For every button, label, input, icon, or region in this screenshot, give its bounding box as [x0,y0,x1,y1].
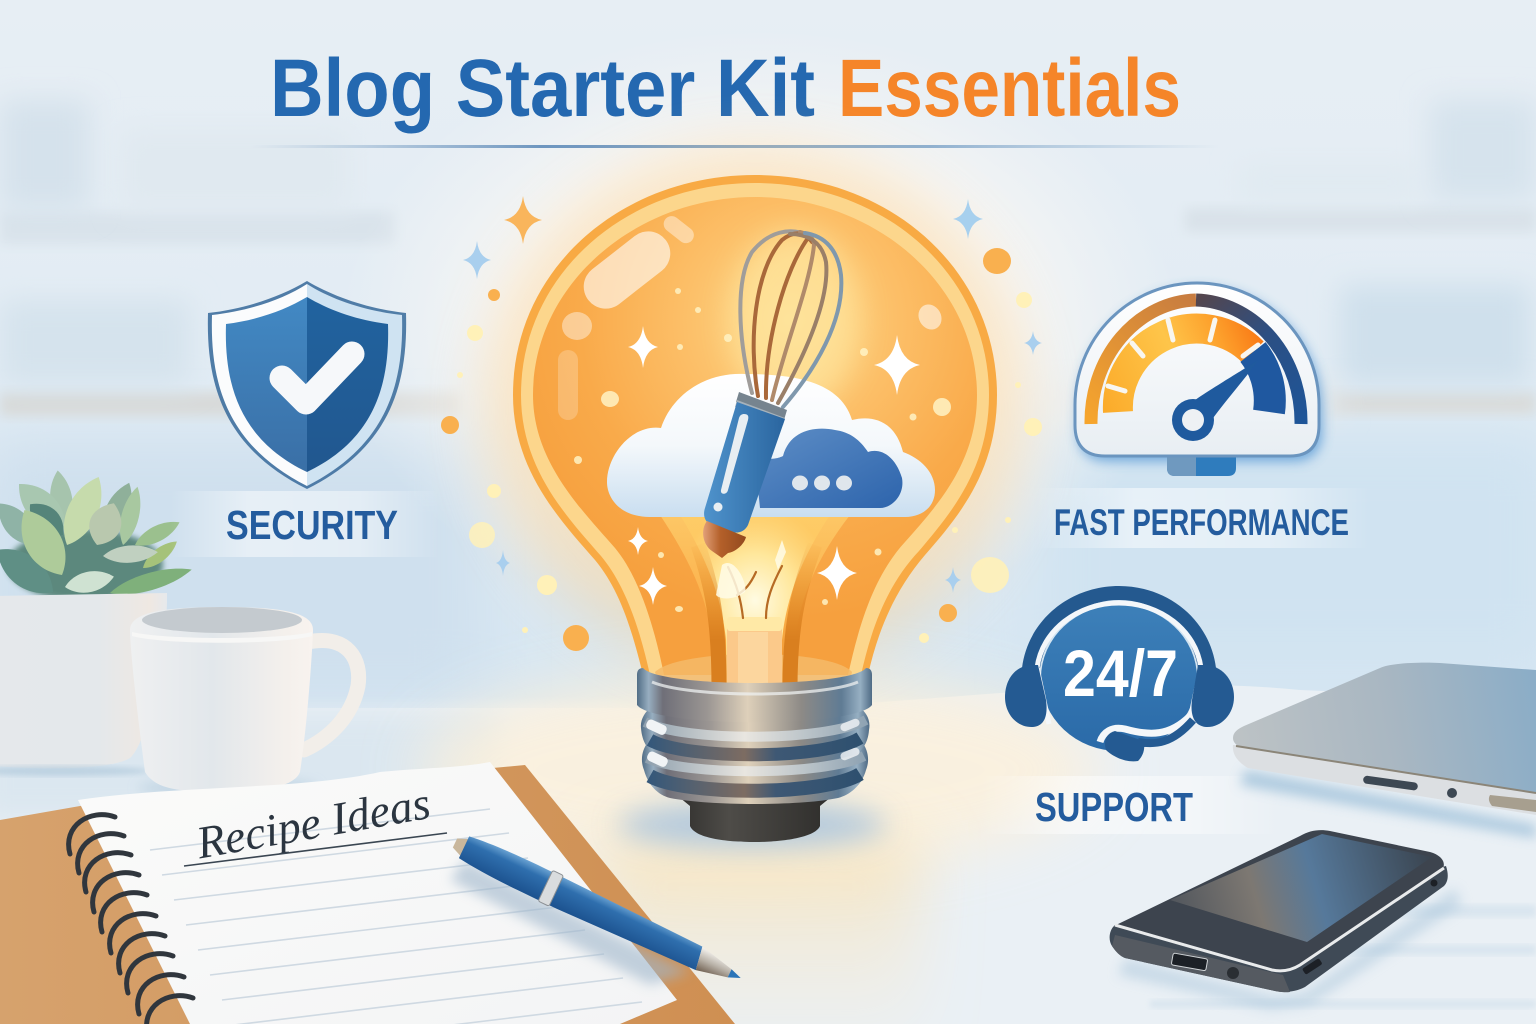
phone ports [1171,953,1208,971]
stem walls [698,545,815,688]
gauge inner band [1118,329,1253,412]
base cap [668,788,842,842]
icon: 24/7 headset [1005,586,1234,761]
headband [1022,586,1216,668]
gauge needle [1185,360,1258,432]
glass: inner fill [533,197,977,675]
glass: light band [521,183,989,675]
wires [740,231,841,407]
coffee mug [130,607,359,798]
whisk [703,231,841,558]
fast performance label: FAST PERFORMANCE [1054,502,1349,543]
handle [704,402,785,533]
gauge glow [1078,288,1322,461]
title underline [250,145,1220,148]
bulb outer glow [485,150,1025,670]
title [270,43,1181,134]
middle thread [641,708,869,762]
title: Blog Starter Kit [270,43,815,134]
microphone boom [1100,716,1190,742]
gauge body [1075,283,1319,456]
paper [78,762,677,1024]
clipboard backing [0,765,735,1024]
fast performance label band [1035,488,1370,548]
inner glow behind whisk [730,230,860,410]
filament [728,566,782,618]
spiral binding [69,815,193,1024]
title: Essentials [838,43,1181,134]
pot shadow [0,766,150,776]
24/7 number: 24/7 [1063,636,1178,710]
ruled lines [150,809,642,1024]
top collar [637,668,872,722]
support label: SUPPORT [1035,784,1193,830]
microphone [1105,731,1144,761]
gauge stand [1167,452,1236,476]
thread highlights [645,718,861,768]
glowing specks [574,288,951,612]
lightbulb [513,175,997,688]
gauge ticks [1108,320,1258,391]
glass stem [660,515,850,686]
icon: security shield [208,281,406,489]
security label: SECURITY [226,502,398,548]
icon: speedometer [1075,283,1322,476]
lower thread [642,742,868,804]
phone screen [1170,834,1432,942]
copper tip [703,521,746,558]
base pool [655,654,852,688]
check mark [282,354,352,402]
security label band [170,491,440,557]
headband inner highlight [1037,603,1201,724]
phone body [1110,866,1448,992]
pen [448,828,748,993]
silver edge [1115,868,1444,971]
floating sparkles [463,196,1042,593]
bulb shadow on desk [617,801,887,849]
support disc [1041,605,1197,751]
gauge outer arc [1091,300,1196,424]
cloud dots [792,476,852,490]
support label band [980,776,1280,834]
reflections [558,213,946,420]
ear cups [1005,665,1047,727]
cloud: white [607,374,935,517]
cloud: blue [755,429,902,508]
floating orbs [441,248,1042,651]
handwritten heading: Recipe Ideas [192,777,434,869]
plant [0,469,194,768]
phone face [1116,830,1444,971]
smartphone [1110,830,1462,1010]
glass: outer rim [513,175,997,675]
filament mount [727,627,782,687]
notebook [0,762,735,1024]
plant pot [0,593,167,768]
inner sparkles [628,326,920,605]
lightbulb screw base [637,668,872,842]
collar [736,392,787,420]
laptop [1233,663,1536,838]
